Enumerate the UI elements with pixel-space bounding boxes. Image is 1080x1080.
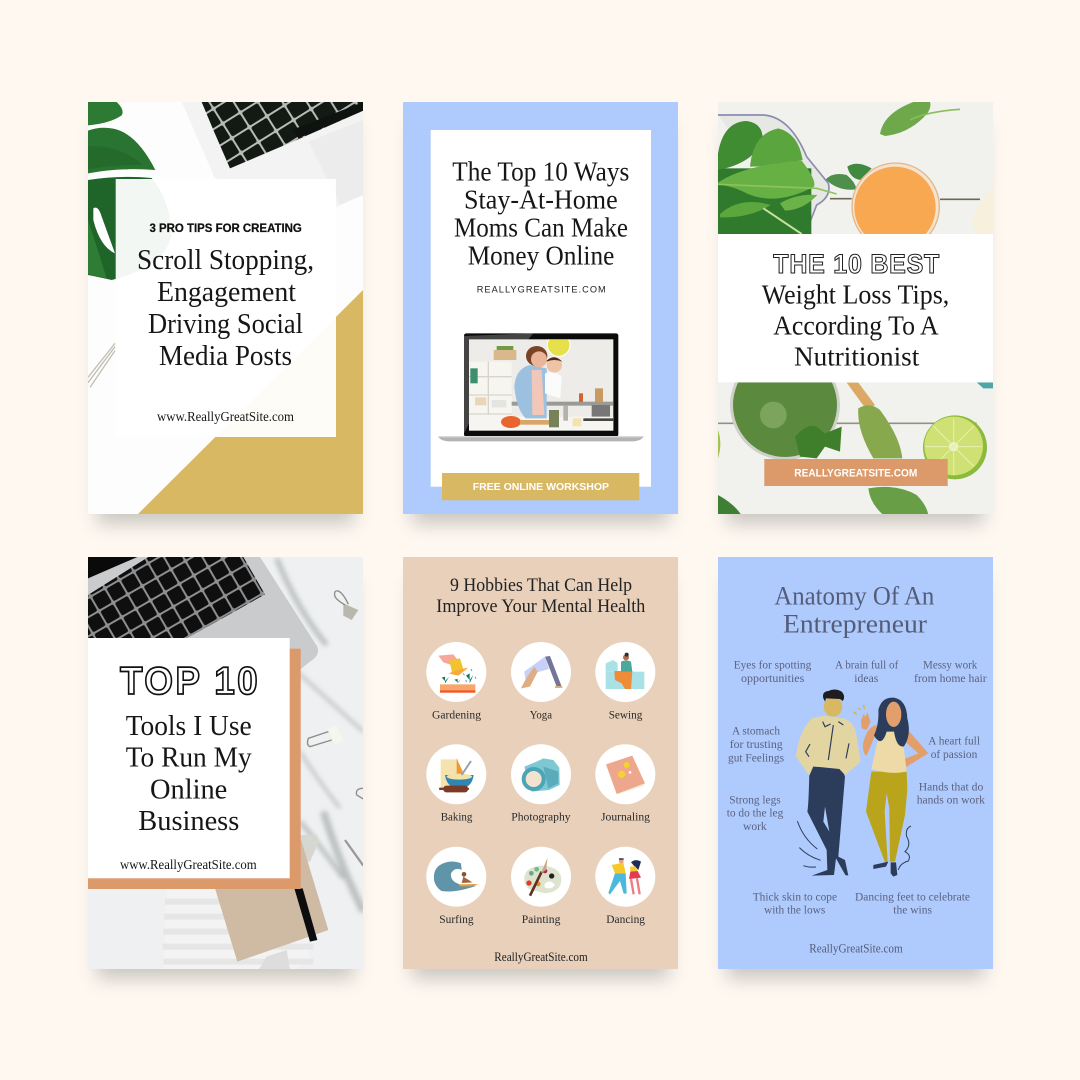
icon: surfing: [434, 862, 479, 892]
white box: [431, 130, 651, 487]
callouts: Dancing feet to celebrate: [855, 889, 970, 903]
headline: [137, 245, 314, 372]
button: [442, 473, 639, 500]
icon labels: Photography: [511, 810, 571, 824]
photo: laptop and monstera leaf: [88, 102, 363, 387]
title: [774, 581, 934, 638]
callouts: Strong legs: [729, 792, 781, 806]
title: 9 Hobbies That Can Help: [450, 576, 632, 596]
laptop with mother and baby photo: [438, 333, 644, 441]
callouts: from home hair: [914, 671, 987, 685]
white text box: [116, 179, 336, 437]
icon: journaling: [606, 756, 645, 794]
outlined heading: THE 10 BEST: [773, 248, 939, 279]
callouts: Thick skin to cope: [753, 889, 837, 903]
headline: [452, 156, 629, 271]
callouts: Eyes for spotting: [734, 658, 811, 672]
panel: social post tips card: [88, 102, 363, 514]
drop shadows under cards: [97, 125, 984, 979]
callouts: with the lows: [764, 903, 826, 917]
website: ReallyGreatSite.com: [809, 940, 903, 955]
panel: anatomy of an entrepreneur card: [718, 557, 993, 969]
headline: Moms Can Make: [454, 212, 628, 243]
callouts: gut Feelings: [728, 750, 784, 764]
callouts: to do the leg: [727, 806, 783, 820]
man: [796, 689, 911, 876]
website: REALLYGREATSITE.COM: [477, 284, 606, 294]
headline: Scroll Stopping,: [137, 245, 314, 276]
button: [764, 459, 948, 486]
photo: marble desk with laptop, clips, notebook: [88, 557, 363, 970]
icon labels: Baking: [441, 810, 472, 824]
title: [436, 576, 645, 617]
title: Improve Your Mental Health: [436, 597, 645, 617]
callouts: work: [743, 819, 767, 833]
callouts: A heart full: [928, 734, 981, 748]
title: Entrepreneur: [783, 609, 927, 638]
headline: Money Online: [468, 240, 614, 271]
headline: Media Posts: [159, 341, 292, 372]
orange frame: [88, 649, 301, 889]
icon: photography: [522, 758, 560, 792]
website: www.ReallyGreatSite.com: [120, 857, 257, 872]
headline: Driving Social: [148, 309, 303, 340]
panel: nine hobbies card: [403, 557, 678, 969]
callouts: [727, 658, 987, 917]
icon circles: [426, 642, 655, 907]
icon labels: Yoga: [530, 707, 553, 721]
icon: dancing: [608, 858, 641, 894]
photo: spinach, juice, smoothie, lime: [718, 102, 993, 515]
button label: FREE ONLINE WORKSHOP: [473, 481, 609, 493]
icon labels: [432, 707, 650, 926]
website: www.ReallyGreatSite.com: [157, 409, 294, 424]
callouts: for trusting: [730, 737, 783, 751]
headline: To Run My: [126, 743, 252, 774]
headline: Business: [138, 806, 239, 837]
icon labels: Surfing: [439, 912, 474, 926]
headline: According To A: [773, 310, 939, 340]
callouts: opportunities: [741, 671, 805, 685]
icon: painting: [524, 857, 561, 896]
title: Anatomy Of An: [774, 581, 934, 610]
headline: [126, 711, 252, 837]
callouts: hands on work: [917, 793, 985, 807]
white box: [88, 638, 290, 878]
headline: Engagement: [157, 277, 296, 308]
headline: Online: [150, 774, 227, 805]
headline: Tools I Use: [126, 711, 252, 742]
icon: gardening: [438, 654, 476, 693]
headline: [762, 279, 949, 371]
callouts: Hands that do: [919, 780, 983, 794]
icon: baking: [439, 758, 474, 792]
callouts: A brain full of: [835, 658, 898, 672]
icon: yoga: [521, 656, 562, 688]
callouts: ideas: [854, 671, 879, 685]
headline: The Top 10 Ways: [452, 156, 629, 187]
callouts: the wins: [893, 903, 932, 917]
white band: [718, 234, 993, 382]
callouts: A stomach: [732, 724, 780, 738]
illustration: two entrepreneurs: [796, 689, 928, 877]
eyebrow: 3 PRO TIPS FOR CREATING: [150, 221, 302, 235]
outlined heading: TOP 10: [120, 659, 258, 703]
icon labels: Sewing: [609, 707, 642, 721]
headline: Stay-At-Home: [464, 184, 618, 215]
icon labels: Gardening: [432, 707, 481, 721]
gold diagonal: [138, 290, 363, 514]
woman: [853, 698, 928, 877]
icon: sewing: [606, 653, 644, 689]
icon labels: Painting: [522, 912, 560, 926]
headline: Nutritionist: [794, 341, 920, 371]
callouts: of passion: [931, 747, 977, 761]
callouts: Messy work: [923, 658, 977, 672]
button label: REALLYGREATSITE.COM: [794, 468, 917, 480]
website: ReallyGreatSite.com: [494, 949, 588, 964]
panel: stay-at-home moms card: [403, 102, 678, 514]
icon labels: Journaling: [601, 810, 650, 824]
headline: Weight Loss Tips,: [762, 279, 949, 309]
icon labels: Dancing: [606, 912, 645, 926]
panel: top 10 tools card: [88, 557, 363, 970]
panel: weight loss tips card: [718, 102, 993, 515]
